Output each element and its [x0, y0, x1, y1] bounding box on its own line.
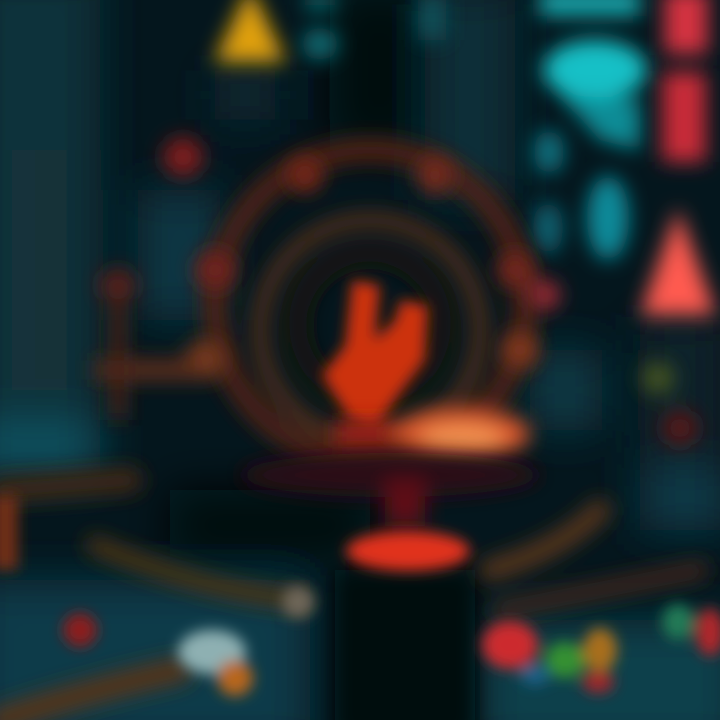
- right wall: small indicator lights: [642, 362, 698, 446]
- red light: upper left: [163, 137, 203, 177]
- foreground: wires: [0, 480, 700, 720]
- neon sign: cyan glyphs: [302, 0, 647, 260]
- machine: glowing furnace: [335, 408, 530, 460]
- machine: central red figure: [322, 280, 428, 430]
- machine: base bowl: [240, 453, 540, 526]
- machine: ring nodes: [95, 157, 560, 420]
- foreground: red capped cylinder: [335, 531, 475, 720]
- neon sign: red column: [662, 0, 708, 162]
- machine: ornate gear ring: [215, 150, 525, 460]
- neon sign: glowing red triangle: [640, 208, 716, 315]
- foreground: coloured buttons: [482, 604, 720, 693]
- neon sign: yellow triangle: [214, 0, 286, 62]
- foreground: small lights left: [0, 495, 314, 696]
